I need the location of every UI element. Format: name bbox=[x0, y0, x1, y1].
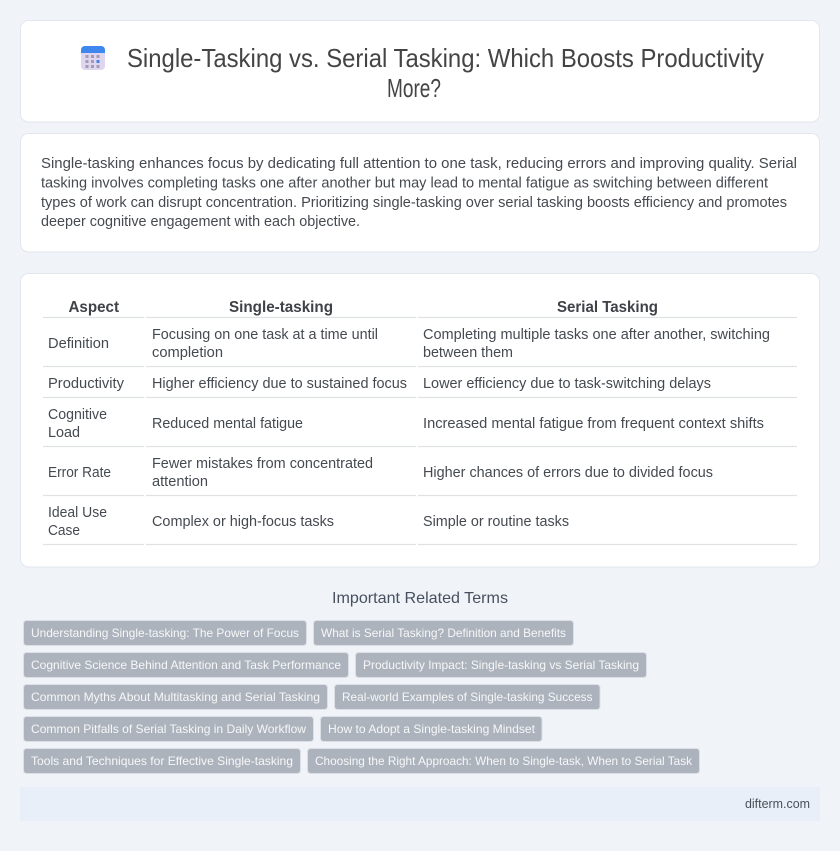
tag bbox=[24, 748, 300, 774]
tag bbox=[356, 652, 646, 678]
row: productivity: Higher efficiency due to sustained focus bbox=[152, 376, 407, 392]
row: definition: between them bbox=[423, 345, 513, 361]
row: ideal use case: Simple or routine tasks bbox=[423, 514, 569, 530]
icon: calendar bbox=[81, 46, 105, 70]
tag bbox=[334, 684, 600, 710]
row: definition: Completing multiple tasks one after another, switching bbox=[423, 327, 770, 343]
title: More? bbox=[387, 75, 441, 103]
title: Single-Tasking vs. Serial Tasking: Which Boosts Productivity bbox=[127, 45, 764, 73]
tag bbox=[24, 716, 314, 742]
text block: summary: deeper cognitive engagement with each objective. bbox=[41, 214, 360, 230]
footer credit: difterm.com bbox=[745, 796, 810, 811]
text block: summary: types of work can disrupt concentration. Prioritizing single-tasking over serial tasking boosts efficiency and promotes bbox=[41, 195, 787, 211]
text block: summary bbox=[41, 156, 797, 230]
tag bbox=[320, 716, 542, 742]
tag: Real-world Examples of Single-tasking Success bbox=[342, 690, 592, 704]
row: definition: Focusing on one task at a time until bbox=[152, 327, 378, 343]
tag: Tools and Techniques for Effective Single-tasking bbox=[31, 754, 293, 768]
row: productivity bbox=[43, 376, 797, 398]
row: error rate: Higher chances of errors due to divided focus bbox=[423, 465, 713, 481]
row: definition: Definition bbox=[48, 336, 109, 352]
tag: Cognitive Science Behind Attention and Task Performance bbox=[31, 658, 341, 672]
row: ideal use case: Ideal Use bbox=[48, 505, 107, 521]
text block: summary: Single-tasking enhances focus by dedicating full attention to one task, reducing errors and improving quality. Serial bbox=[41, 156, 797, 172]
table header: Serial Tasking bbox=[557, 299, 658, 316]
table header: Aspect bbox=[68, 299, 119, 316]
row: error rate bbox=[43, 456, 797, 496]
table header bbox=[43, 299, 797, 318]
tag: How to Adopt a Single-tasking Mindset bbox=[328, 722, 536, 736]
row: cognitive load: Cognitive bbox=[48, 407, 107, 423]
row: cognitive load: Increased mental fatigue from frequent context shifts bbox=[423, 416, 764, 432]
row: definition bbox=[43, 327, 797, 366]
tag bbox=[24, 652, 348, 678]
row: definition: completion bbox=[152, 345, 223, 361]
row: cognitive load: Reduced mental fatigue bbox=[152, 416, 303, 432]
row: ideal use case bbox=[43, 505, 797, 544]
panel: summary paragraph bbox=[20, 134, 820, 252]
tag bbox=[308, 748, 700, 774]
table header: Single-tasking bbox=[229, 299, 333, 316]
tag list bbox=[24, 620, 700, 774]
row: cognitive load bbox=[43, 407, 797, 446]
row: cognitive load: Load bbox=[48, 425, 80, 441]
tag: Choosing the Right Approach: When to Single-task, When to Serial Task bbox=[315, 754, 693, 768]
row: ideal use case: Case bbox=[48, 523, 80, 539]
row: productivity: Lower efficiency due to task-switching delays bbox=[423, 376, 711, 392]
row: productivity: Productivity bbox=[48, 376, 125, 392]
tag bbox=[314, 620, 574, 646]
title bbox=[127, 45, 764, 103]
tag: Common Pitfalls of Serial Tasking in Daily Workflow bbox=[31, 722, 306, 736]
panel: comparison table bbox=[20, 274, 820, 567]
tag: What is Serial Tasking? Definition and Benefits bbox=[321, 626, 566, 640]
row: ideal use case: Complex or high-focus tasks bbox=[152, 514, 334, 530]
heading: important related terms: Important Related Terms bbox=[332, 590, 508, 607]
tag bbox=[24, 620, 306, 646]
tag: Productivity Impact: Single-tasking vs Serial Tasking bbox=[363, 658, 639, 672]
row: error rate: Fewer mistakes from concentrated bbox=[152, 456, 373, 472]
tag bbox=[24, 684, 328, 710]
header panel bbox=[20, 20, 820, 122]
footer bbox=[20, 787, 820, 821]
tag: Understanding Single-tasking: The Power of Focus bbox=[31, 626, 299, 640]
row: error rate: attention bbox=[152, 474, 208, 490]
tag: Common Myths About Multitasking and Serial Tasking bbox=[31, 690, 320, 704]
text block: summary: tasking involves completing tasks one after another but may lead to mental fatigue as switching between different bbox=[41, 176, 768, 192]
row: error rate: Error Rate bbox=[48, 465, 111, 481]
